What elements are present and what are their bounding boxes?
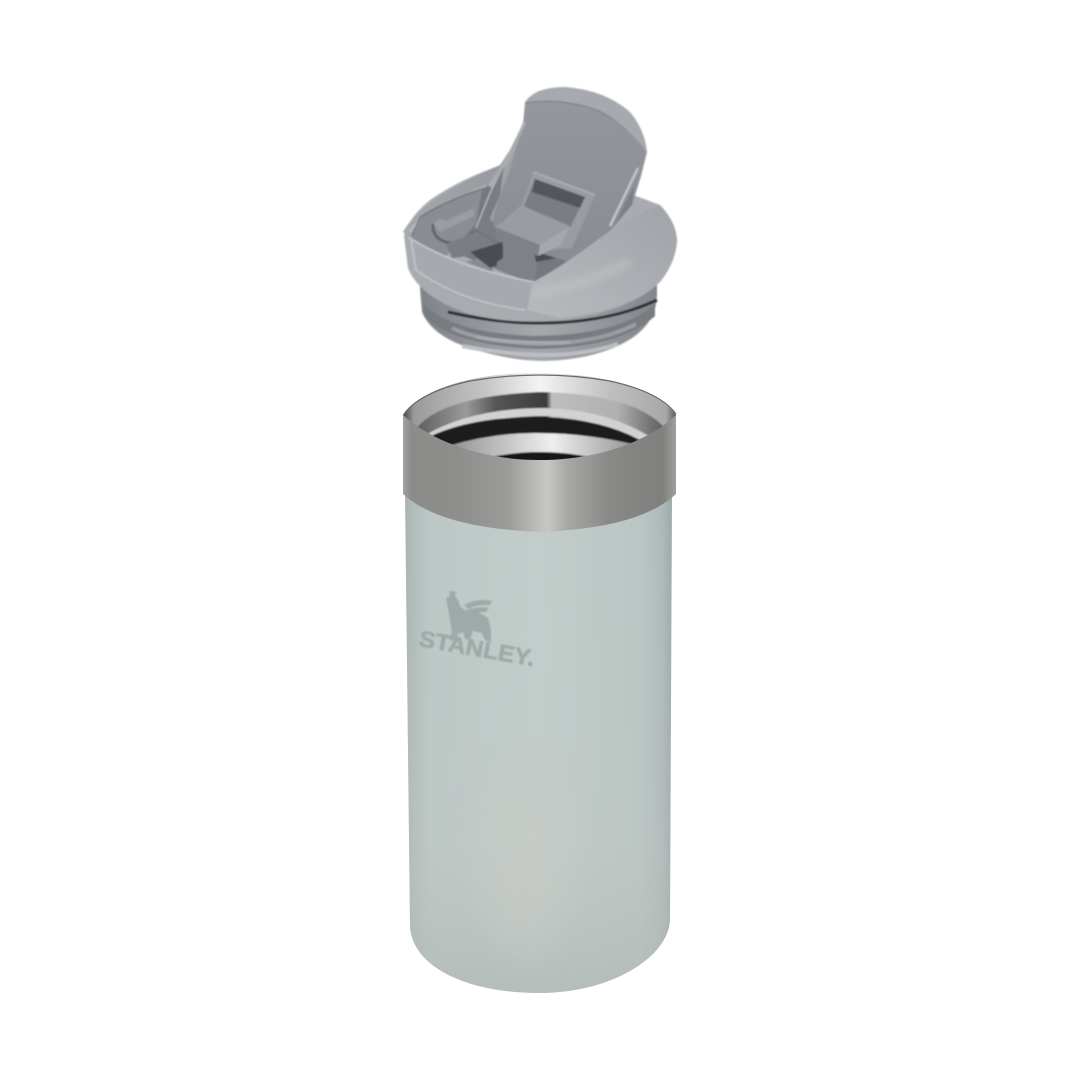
inner black base bbox=[494, 451, 587, 460]
logo: wordmark: STANLEY. bbox=[417, 625, 537, 671]
left front tab bbox=[409, 237, 534, 310]
light ring bbox=[428, 406, 648, 440]
flap body bbox=[476, 102, 647, 270]
logo: wings bbox=[464, 600, 492, 618]
mouth rim edge bbox=[404, 375, 676, 414]
tumbler mouth bbox=[403, 373, 676, 460]
recess details bbox=[412, 190, 560, 284]
flap back edge bbox=[525, 87, 647, 152]
lid bbox=[403, 87, 677, 361]
inner wall bbox=[403, 373, 676, 426]
product illustration: tumbler and lid bbox=[402, 86, 678, 993]
dark crescent bbox=[432, 416, 640, 445]
flap left arm bbox=[476, 164, 504, 240]
lid threads bbox=[420, 280, 657, 361]
logo: bear bbox=[446, 591, 491, 642]
inner lens bbox=[452, 432, 632, 456]
spout bridge bbox=[495, 207, 570, 245]
inner shoulder bbox=[418, 391, 663, 436]
steel collar bbox=[403, 415, 676, 532]
flap right arm bbox=[610, 168, 638, 226]
spout frame bbox=[496, 172, 595, 250]
right lid grip bbox=[527, 205, 677, 318]
tumbler bbox=[400, 370, 680, 993]
brand logo bbox=[417, 591, 537, 671]
lid outer shell bbox=[404, 165, 677, 322]
tumbler body bbox=[405, 490, 672, 993]
flap gap behind right arm bbox=[614, 186, 634, 226]
spout opening bbox=[524, 179, 585, 228]
lid top rim bbox=[403, 165, 500, 238]
recess floor bbox=[411, 186, 610, 284]
